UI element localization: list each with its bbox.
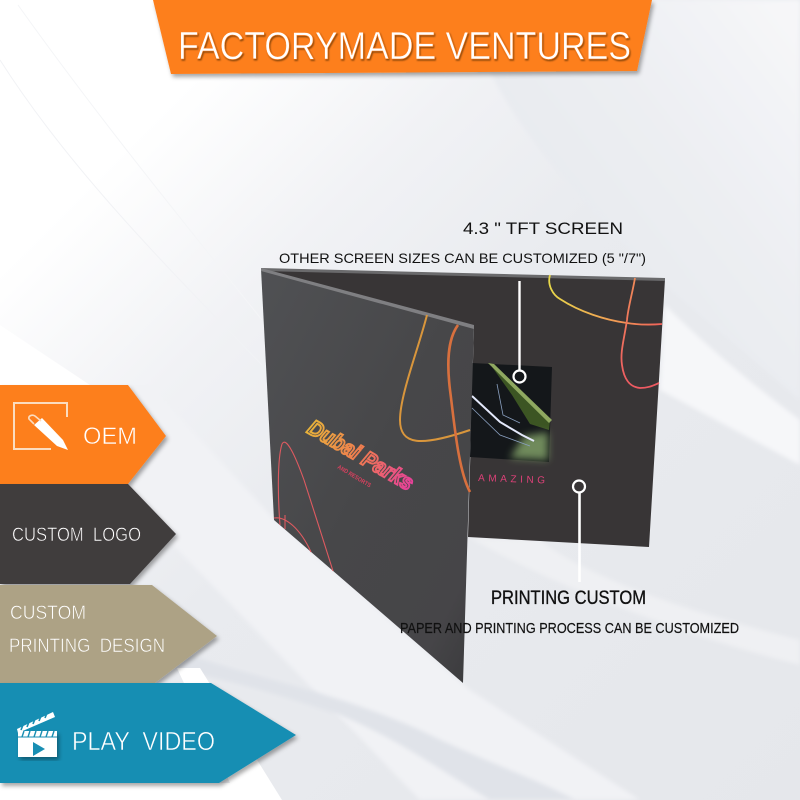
icon: pen in frame <box>14 403 68 450</box>
design label: PRINTING DESIGN <box>9 636 165 657</box>
screen heading: 4.3 " TFT SCREEN <box>463 219 623 238</box>
title text: FACTORYMADE VENTURES <box>178 25 631 68</box>
screen subheading: OTHER SCREEN SIZES CAN BE CUSTOMIZED (5 "/7") <box>279 250 646 266</box>
screen leader line <box>518 281 521 370</box>
video arrow <box>0 683 296 783</box>
video label: PLAY VIDEO <box>72 726 215 756</box>
printing subheading: PAPER AND PRINTING PROCESS CAN BE CUSTOMIZED <box>400 620 739 637</box>
printing heading: PRINTING CUSTOM <box>491 588 646 609</box>
tab: printing design <box>0 585 217 683</box>
printing marker <box>573 480 585 492</box>
cover logo: AND RESORTS <box>336 465 372 489</box>
OEM label: OEM <box>83 423 137 450</box>
design arrow <box>0 585 217 683</box>
cover top edge <box>261 268 474 329</box>
tab: OEM <box>0 385 166 484</box>
banner shape <box>153 0 652 74</box>
back panel <box>261 269 665 547</box>
AMAZING label: AMAZING <box>478 473 545 486</box>
screen marker <box>514 370 526 382</box>
cover curves <box>274 315 470 571</box>
screen <box>470 363 552 462</box>
brochure <box>261 268 665 683</box>
top edge <box>261 268 665 281</box>
design label: CUSTOM <box>10 603 86 624</box>
design label <box>9 603 165 657</box>
printing leader line <box>578 493 581 582</box>
title banner <box>153 0 652 74</box>
front cover <box>261 269 474 683</box>
OEM arrow <box>0 385 166 484</box>
logo arrow <box>0 484 176 584</box>
tab: custom logo <box>0 484 176 584</box>
icon: clapperboard <box>17 712 57 757</box>
callout: screen <box>279 219 646 382</box>
tab: play video <box>0 683 296 783</box>
back panel curves <box>549 275 662 388</box>
logo label: CUSTOM LOGO <box>12 525 141 546</box>
callout: printing <box>400 480 739 637</box>
cover logo: Dubai Parks <box>304 415 418 495</box>
